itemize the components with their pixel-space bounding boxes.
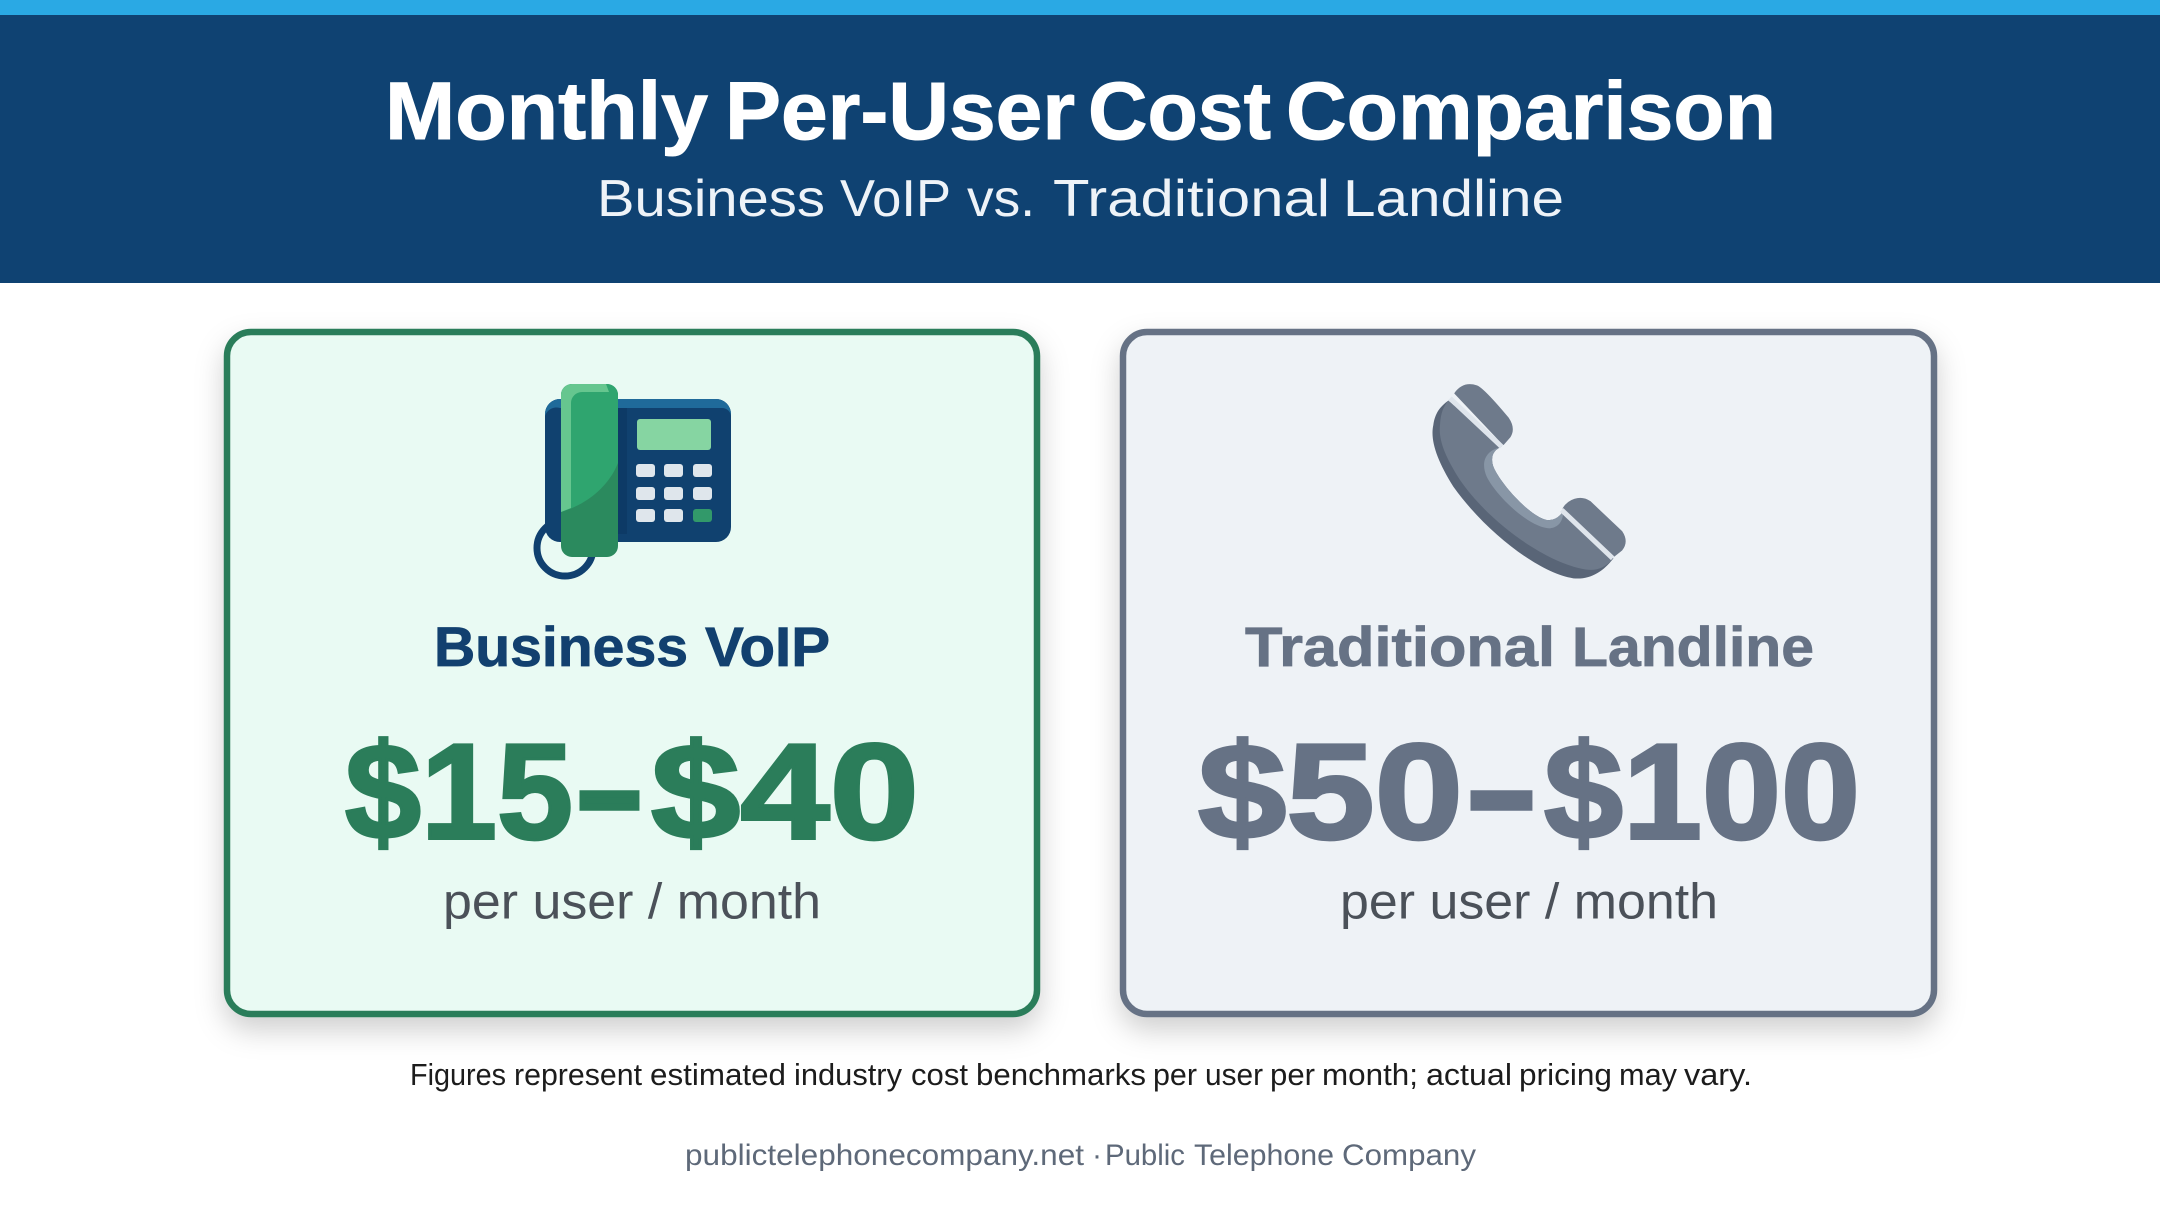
- footnote: pricing: [1519, 1057, 1612, 1092]
- label: Business VoIP: [434, 615, 830, 678]
- price: $50–$100: $100: [1544, 716, 1860, 868]
- price: $15–$40: –: [579, 714, 640, 866]
- footnote: month;: [1322, 1057, 1418, 1092]
- source line: ·: [1092, 1139, 1102, 1172]
- source line: publictelephonecompany.net: [685, 1139, 1085, 1172]
- icon: desk phone: [537, 384, 731, 576]
- source line: Company: [1342, 1139, 1476, 1172]
- label: Business VoIP: VoIP: [705, 615, 830, 678]
- price: $50–$100: [1198, 714, 1860, 868]
- source line: Telephone: [1194, 1139, 1334, 1172]
- icon: phone handset: [1432, 385, 1625, 579]
- footnote: benchmarks: [976, 1057, 1146, 1092]
- title: [385, 66, 1776, 157]
- footnote: Figures: [410, 1057, 506, 1092]
- footnote: actual: [1426, 1057, 1512, 1092]
- subtitle: Landline: [1343, 170, 1564, 228]
- price: $50–$100: –: [1470, 714, 1533, 866]
- footnote: per: [1153, 1057, 1197, 1092]
- label: Business VoIP: Business: [434, 615, 688, 678]
- footnote: industry: [794, 1057, 902, 1092]
- subtitle: Traditional: [1053, 170, 1330, 228]
- title: Monthly: [385, 66, 708, 157]
- source line: Public: [1105, 1139, 1185, 1172]
- label: Traditional Landline: Traditional: [1245, 615, 1555, 678]
- footnote: [410, 1057, 1752, 1092]
- footnote: cost: [911, 1057, 968, 1092]
- footnote: user: [1205, 1057, 1263, 1092]
- price: $15–$40: $15: [345, 716, 573, 868]
- unit label: per user / month: [443, 874, 821, 930]
- label: Traditional Landline: [1245, 615, 1814, 678]
- price: $15–$40: $40: [651, 716, 919, 868]
- title: Per-User: [725, 66, 1075, 157]
- title: Cost: [1088, 66, 1271, 157]
- unit label: per user / month: [1340, 874, 1718, 930]
- subtitle: vs.: [967, 170, 1035, 228]
- panel: Traditional Landline: [1123, 332, 1934, 1014]
- header banner: [0, 0, 2160, 283]
- footnote: vary.: [1684, 1057, 1752, 1092]
- panel: Business VoIP: [227, 332, 1037, 1014]
- price: $50–$100: $50: [1198, 716, 1463, 868]
- footnote: per: [1270, 1057, 1315, 1092]
- price: $15–$40: [345, 714, 919, 868]
- title: Comparison: [1286, 66, 1776, 157]
- source line: [685, 1139, 1476, 1172]
- footnote: represent: [514, 1057, 642, 1092]
- subtitle: [597, 170, 1564, 228]
- label: Traditional Landline: Landline: [1572, 615, 1814, 678]
- footnote: may: [1619, 1057, 1677, 1092]
- subtitle: Business: [597, 170, 825, 228]
- subtitle: VoIP: [840, 170, 951, 228]
- footnote: estimated: [650, 1057, 786, 1092]
